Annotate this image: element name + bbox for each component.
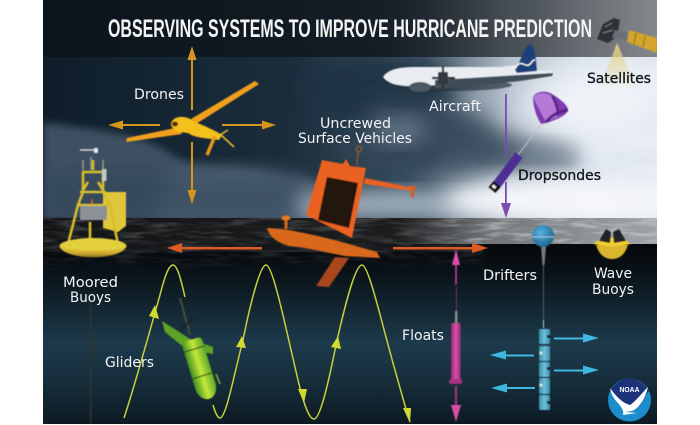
- label: Moored Buoys: Buoys: [70, 290, 111, 306]
- arrow: dropsonde descent: [501, 94, 511, 218]
- label: Gliders: Gliders: [105, 355, 154, 371]
- icon: NOAA logo: NOAA: [620, 387, 640, 394]
- label: Drifters: Drifters: [483, 268, 537, 284]
- panel: underwater: [43, 218, 657, 424]
- label: Wave Buoys: [593, 268, 634, 297]
- arrows: drone directions: [108, 46, 276, 204]
- label: Aircraft: Aircraft: [429, 99, 481, 115]
- icon: moored buoy: [60, 148, 126, 424]
- icon: aircraft: [383, 44, 553, 92]
- label: Uncrewed Surface Vehicles: Surface Vehicles: [298, 131, 412, 147]
- chart: glider path: [124, 265, 411, 423]
- icon: drone: [126, 81, 259, 155]
- icon: dropsonde: [492, 92, 568, 190]
- label: Drones: Drones: [134, 87, 184, 103]
- label: Moored Buoys: [63, 275, 118, 306]
- icon: wave buoy: [593, 229, 631, 259]
- arrows: surface vehicle directions: [167, 243, 488, 253]
- label: Satellites: Satellites: [587, 71, 651, 87]
- label: Wave Buoys: Wave: [594, 266, 632, 282]
- icon: uncrewed surface vehicle: [267, 146, 417, 287]
- arrows: drifter currents: [490, 334, 599, 392]
- label: Moored Buoys: Moored: [63, 275, 118, 291]
- icon: glider: [162, 298, 220, 402]
- icon: profiling float with arrows: [449, 249, 462, 422]
- icon: NOAA logo: [608, 378, 651, 422]
- label: Dropsondes: Dropsondes: [518, 168, 601, 184]
- panel: title band: [43, 0, 657, 57]
- panel: sea surface: [43, 218, 657, 246]
- icon: drifter: [532, 225, 554, 410]
- label: Uncrewed Surface Vehicles: Uncrewed: [320, 116, 391, 132]
- label: Wave Buoys: Buoys: [592, 282, 634, 298]
- icon: satellite: [597, 18, 657, 88]
- label: Uncrewed Surface Vehicles: [298, 117, 412, 143]
- panel: stormy sky background: [43, 0, 685, 222]
- label: Floats: Floats: [402, 328, 444, 344]
